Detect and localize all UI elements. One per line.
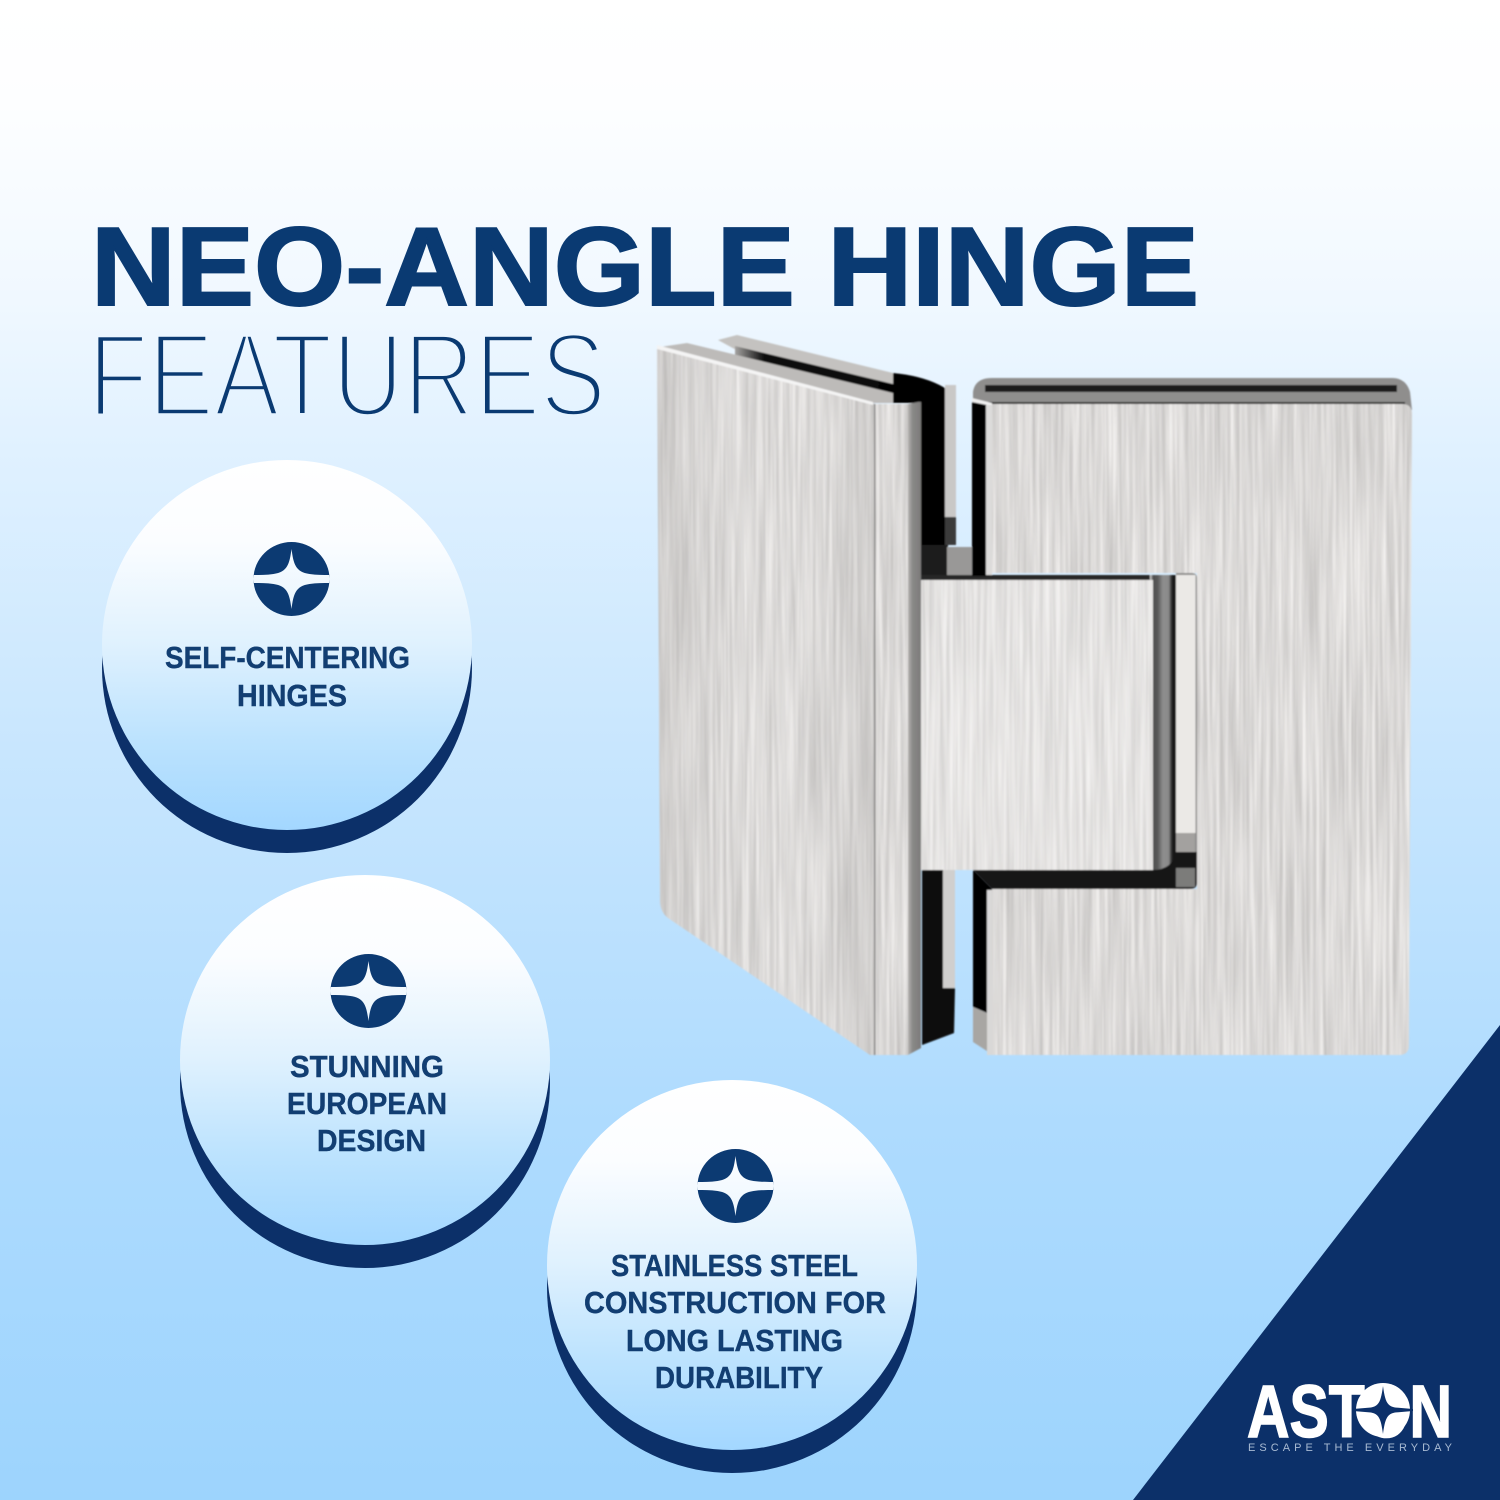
logo wordmark: ASTON — [1247, 1370, 1452, 1453]
product photo: brushed steel hinge — [650, 335, 1415, 1060]
title — [88, 205, 1199, 442]
disc shadow — [180, 898, 550, 1268]
heading: features: FEATURES — [88, 309, 606, 442]
hinge: back lips of left plate — [660, 335, 893, 403]
logo: aston — [1247, 1370, 1453, 1454]
icon: star — [698, 1149, 774, 1223]
disc shadow — [102, 483, 472, 853]
label: STAINLESS STEEL — [611, 1248, 858, 1283]
label — [287, 1049, 447, 1158]
logo tagline: ESCAPE THE EVERYDAY — [1248, 1442, 1453, 1454]
hinge: left plate highlight — [657, 345, 873, 405]
label — [165, 640, 410, 713]
label — [584, 1248, 886, 1395]
disc — [102, 460, 472, 830]
hinge: left plate face — [650, 340, 880, 1060]
hinge: grey strip — [908, 402, 921, 1055]
panel: self-centering hinges — [102, 460, 472, 853]
label: SELF-CENTERING — [165, 640, 410, 675]
disc shadow — [547, 1103, 917, 1473]
hinge: right plate lower edge — [973, 850, 1197, 1055]
hinge: black channel — [893, 373, 1176, 580]
label: EUROPEAN — [287, 1086, 447, 1121]
hinge: side edge line — [874, 404, 876, 1055]
hinge: left plate side — [874, 402, 909, 1056]
panel: stunning european design — [180, 875, 550, 1268]
panel: stainless steel construction — [547, 1080, 917, 1473]
hinge: right plate face — [985, 400, 1415, 1060]
logo star — [1353, 1386, 1413, 1434]
icon: star — [330, 954, 406, 1028]
label: LONG LASTING — [626, 1323, 843, 1358]
label: CONSTRUCTION FOR — [584, 1285, 886, 1320]
logo o disc — [1356, 1383, 1410, 1437]
icon: star — [254, 542, 330, 616]
hinge: right plate back edge — [972, 378, 1412, 576]
hinge: central block — [915, 575, 1155, 875]
label: HINGES — [237, 678, 347, 713]
disc — [547, 1080, 917, 1450]
label: STUNNING — [290, 1049, 444, 1084]
label: DURABILITY — [655, 1360, 823, 1395]
disc — [180, 875, 550, 1245]
label: DESIGN — [317, 1123, 426, 1158]
corner triangle — [1133, 1025, 1500, 1500]
heading: neo-angle hinge: NEO-ANGLE HINGE — [91, 205, 1199, 329]
hinge: lower left channel — [922, 870, 955, 1045]
hinge: knuckle strip — [1150, 573, 1197, 887]
